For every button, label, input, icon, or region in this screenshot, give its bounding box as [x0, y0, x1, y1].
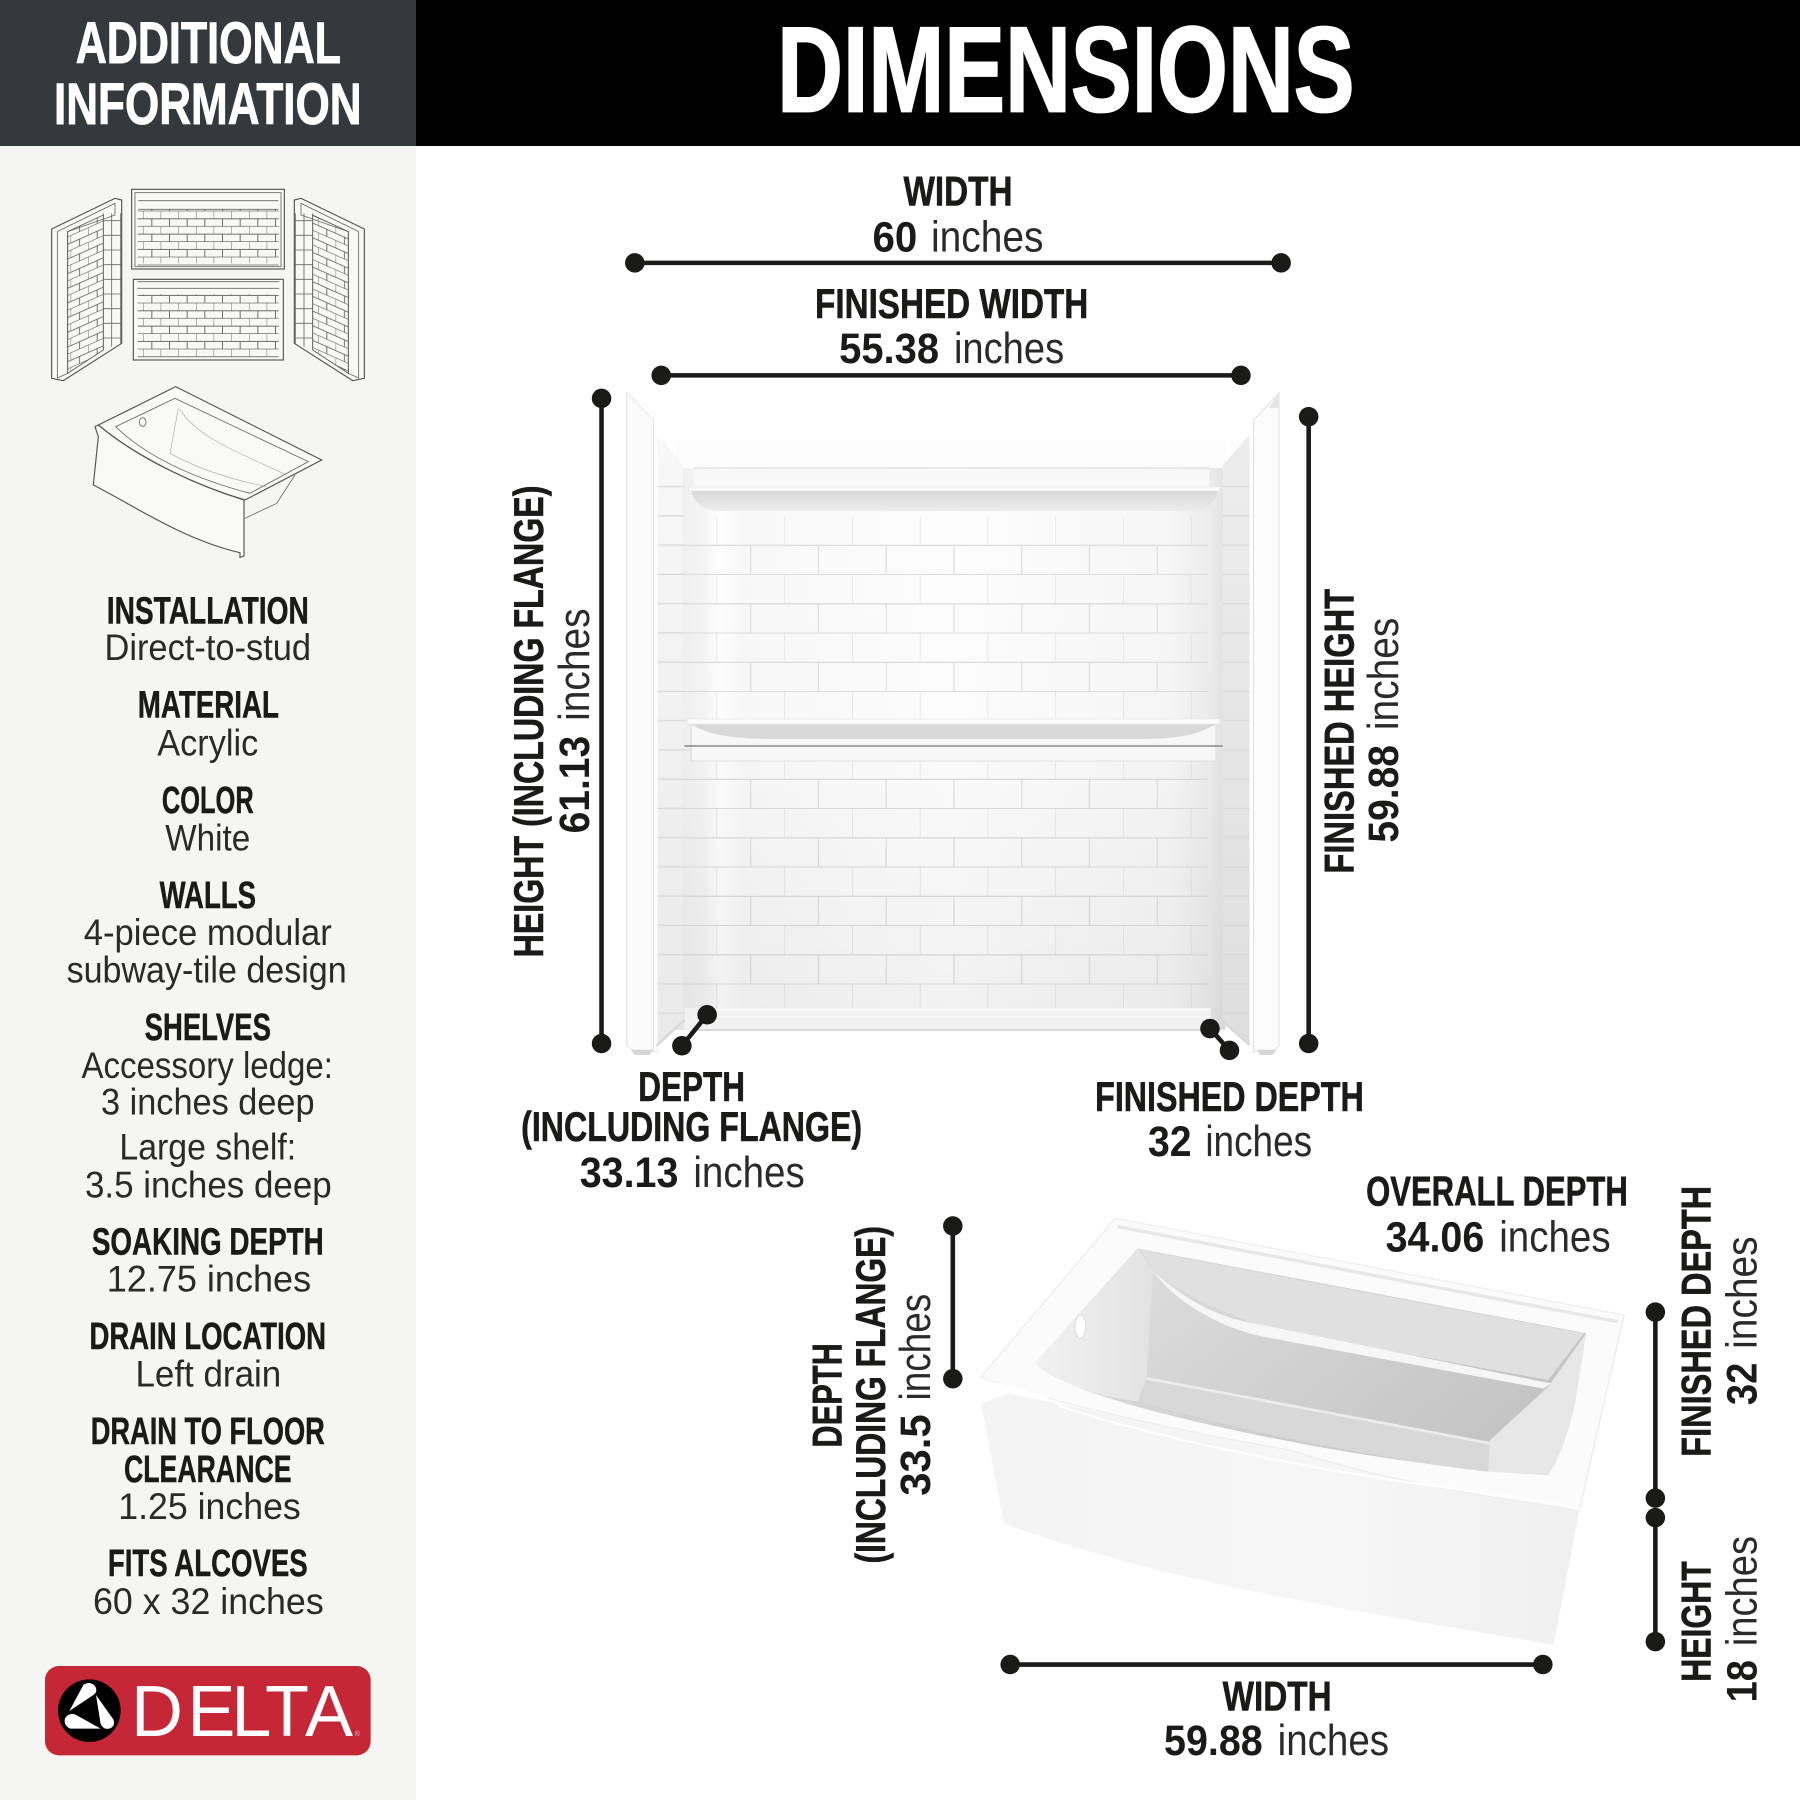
spec: drain to floor clearance: DRAIN TO FLOOR: [91, 1411, 325, 1453]
spec: material: [138, 684, 279, 763]
illustration: exploded wall panels line art: [52, 189, 364, 557]
illustration: shower wall unit: [627, 393, 1279, 1055]
arrow: tub width line: [1000, 1655, 1553, 1674]
ledge highlight: [1153, 1272, 1550, 1389]
accessory ledge: [688, 487, 1220, 511]
spec: walls: 4-piece modular: [84, 912, 332, 953]
dimension: finished width: [815, 281, 1088, 373]
left basin end: [1035, 1248, 1153, 1402]
tub skirt: [981, 1393, 1579, 1645]
spec: installation: Direct-to-stud: [104, 627, 311, 668]
spec: shelves: 3 inches deep: [101, 1082, 315, 1123]
spec: drain to floor clearance: 1.25 inches: [118, 1486, 301, 1527]
spec: shelves: Accessory ledge:: [82, 1045, 333, 1086]
heading: dimensions: DIMENSIONS: [777, 1, 1355, 137]
dimension: tub width: inches: [1278, 1717, 1389, 1765]
spec: drain to floor clearance: [91, 1411, 325, 1527]
dimension: width 60 inches: inches: [931, 213, 1043, 261]
dimension: tub height: inches: [1718, 1536, 1766, 1646]
dimension: tub width: 59.88: [1164, 1717, 1263, 1764]
front edge highlight: [983, 1382, 1579, 1510]
dimension: finished width: inches: [954, 325, 1064, 373]
header block: additional information: [0, 0, 416, 146]
spec: shelves: [82, 1007, 333, 1205]
dimension: width 60 inches: 60: [872, 213, 917, 260]
spec: soaking depth: [92, 1222, 324, 1299]
arrow: tub finished depth line: [1646, 1302, 1665, 1508]
right flange top shade: [1268, 393, 1279, 408]
bottom ledge: [654, 1008, 1254, 1055]
dimension: tub finished depth: FINISHED DEPTH: [1673, 1186, 1719, 1457]
center bottom wall panel: [133, 279, 283, 360]
upper band: [676, 440, 1225, 468]
spec: installation: [104, 590, 311, 668]
dimension: depth including flange: [521, 1064, 862, 1197]
dimension: tub finished depth: 32: [1718, 1363, 1765, 1405]
right side wall: [1223, 435, 1250, 1045]
heading: additional information: INFORMATION: [54, 72, 362, 137]
tub line art: [93, 387, 322, 557]
dimension: finished height: inches: [1360, 618, 1408, 730]
spec: fits alcoves: FITS ALCOVES: [108, 1543, 308, 1585]
tub rim: [981, 1218, 1624, 1510]
spec: drain location: DRAIN LOCATION: [90, 1316, 326, 1358]
spec: drain to floor clearance: CLEARANCE: [124, 1449, 292, 1491]
left side wall: [658, 435, 683, 1045]
spec: color: White: [165, 818, 250, 859]
dimension: tub depth including flange: inches: [892, 1294, 940, 1401]
spec: shelves: SHELVES: [145, 1007, 271, 1049]
basin upper back wall: [1142, 1251, 1584, 1380]
spec: material: Acrylic: [157, 722, 258, 763]
arrow: finished width line: [651, 366, 1251, 385]
dimension: overall depth: OVERALL DEPTH: [1366, 1168, 1628, 1214]
panel: additional information sidebar background: [0, 146, 416, 1800]
spec: fits alcoves: [93, 1543, 324, 1622]
dimension: tub height: 18: [1718, 1660, 1765, 1702]
dimension: finished width: FINISHED WIDTH: [815, 281, 1088, 327]
basin: [1035, 1248, 1586, 1475]
dimension: tub depth including flange: (INCLUDING FLANGE): [848, 1226, 894, 1564]
spec: shelves: Large shelf:: [119, 1126, 296, 1167]
spec: installation: INSTALLATION: [107, 590, 309, 632]
spec: soaking depth: SOAKING DEPTH: [92, 1222, 324, 1264]
dimension: finished depth: 32: [1148, 1118, 1192, 1165]
dimension: overall depth: inches: [1499, 1213, 1611, 1261]
spec: color: [162, 780, 254, 859]
dimension: finished height: 59.88: [1360, 745, 1407, 843]
center top wall panel: [132, 189, 284, 269]
spec: color: COLOR: [162, 780, 254, 822]
spec: walls: WALLS: [160, 875, 256, 917]
arrow: height line: [592, 389, 611, 1053]
dimension: width 60 inches: [872, 168, 1043, 261]
dimension: finished depth: FINISHED DEPTH: [1095, 1074, 1364, 1120]
dimension: height including flange: [506, 486, 599, 957]
dimension: width 60 inches: WIDTH: [903, 168, 1013, 214]
spec: walls: subway-tile design: [67, 950, 347, 991]
dimension: tub finished depth: inches: [1718, 1236, 1766, 1349]
left flange lip: [631, 1050, 654, 1055]
arrow: finished depth tick: [1200, 1019, 1239, 1060]
wall shading: [676, 470, 1225, 1030]
Delta logo: [45, 1666, 371, 1755]
dimension: tub width: WIDTH: [1223, 1673, 1332, 1719]
dimension: overall depth: [1366, 1168, 1628, 1261]
logo mark: [58, 1679, 121, 1742]
right wall panel: [294, 198, 364, 381]
arrow: tub height line: [1646, 1508, 1665, 1651]
left flange: [627, 393, 660, 1052]
spec: walls: [67, 875, 347, 991]
dimension: height including flange: HEIGHT (INCLUDING FLANGE): [506, 486, 552, 957]
drain hole: [1075, 1315, 1086, 1338]
back wall: [676, 440, 1225, 1030]
subway tile joints: [684, 517, 1208, 1008]
dimension: tub depth including flange: 33.5: [892, 1414, 939, 1496]
dimension: depth including flange: (INCLUDING FLANGE): [521, 1104, 862, 1150]
header bar: dimensions: [416, 0, 1800, 146]
heading: additional information: [54, 11, 362, 137]
dimension: tub finished depth: [1673, 1186, 1766, 1457]
dimension: tub width: [1164, 1673, 1389, 1765]
right flange: [1254, 393, 1279, 1052]
arrow: finished height line: [1299, 407, 1318, 1053]
heading: additional information: ADDITIONAL: [76, 11, 341, 76]
arrow: width line: [625, 253, 1291, 273]
dimension: finished height: FINISHED HEIGHT: [1316, 589, 1362, 874]
dimension: depth including flange: DEPTH: [638, 1064, 745, 1110]
dimension: finished depth: inches: [1205, 1118, 1312, 1166]
spec: shelves: 3.5 inches deep: [85, 1164, 332, 1205]
dimension: overall depth: 34.06: [1386, 1213, 1484, 1260]
dimension: finished height: [1316, 589, 1408, 874]
left wall panel: [52, 198, 122, 381]
spec: fits alcoves: 60 x 32 inches: [93, 1581, 324, 1622]
spec: soaking depth: 12.75 inches: [107, 1258, 311, 1299]
dimension: depth including flange: 33.13: [580, 1149, 678, 1196]
large shelf: [684, 719, 1223, 761]
dimension: height including flange: 61.13: [551, 736, 598, 833]
arrow: tub depth line: [943, 1216, 963, 1388]
registered mark: ®: [355, 1729, 361, 1738]
dimension: tub depth including flange: DEPTH: [804, 1343, 850, 1448]
dimension: tub height: [1673, 1536, 1766, 1702]
dimension: tub depth including flange: [804, 1226, 940, 1564]
spec: drain location: [90, 1316, 326, 1395]
spec: material: MATERIAL: [138, 684, 279, 726]
dimension: height including flange: inches: [551, 608, 599, 721]
logo wordmark: DELTA: [131, 1672, 353, 1752]
right flange lip: [1256, 1050, 1276, 1055]
dimension: depth including flange: inches: [693, 1149, 805, 1197]
illustration: bathtub: [981, 1218, 1624, 1645]
dimension: tub height: HEIGHT: [1673, 1561, 1719, 1682]
right basin end: [1488, 1333, 1586, 1475]
dimension: finished width: 55.38: [839, 325, 939, 372]
arrow: depth tick: [672, 1005, 717, 1056]
spec: drain location: Left drain: [135, 1354, 281, 1395]
tub floor: [1138, 1378, 1490, 1472]
dimension: finished depth: [1095, 1074, 1364, 1166]
